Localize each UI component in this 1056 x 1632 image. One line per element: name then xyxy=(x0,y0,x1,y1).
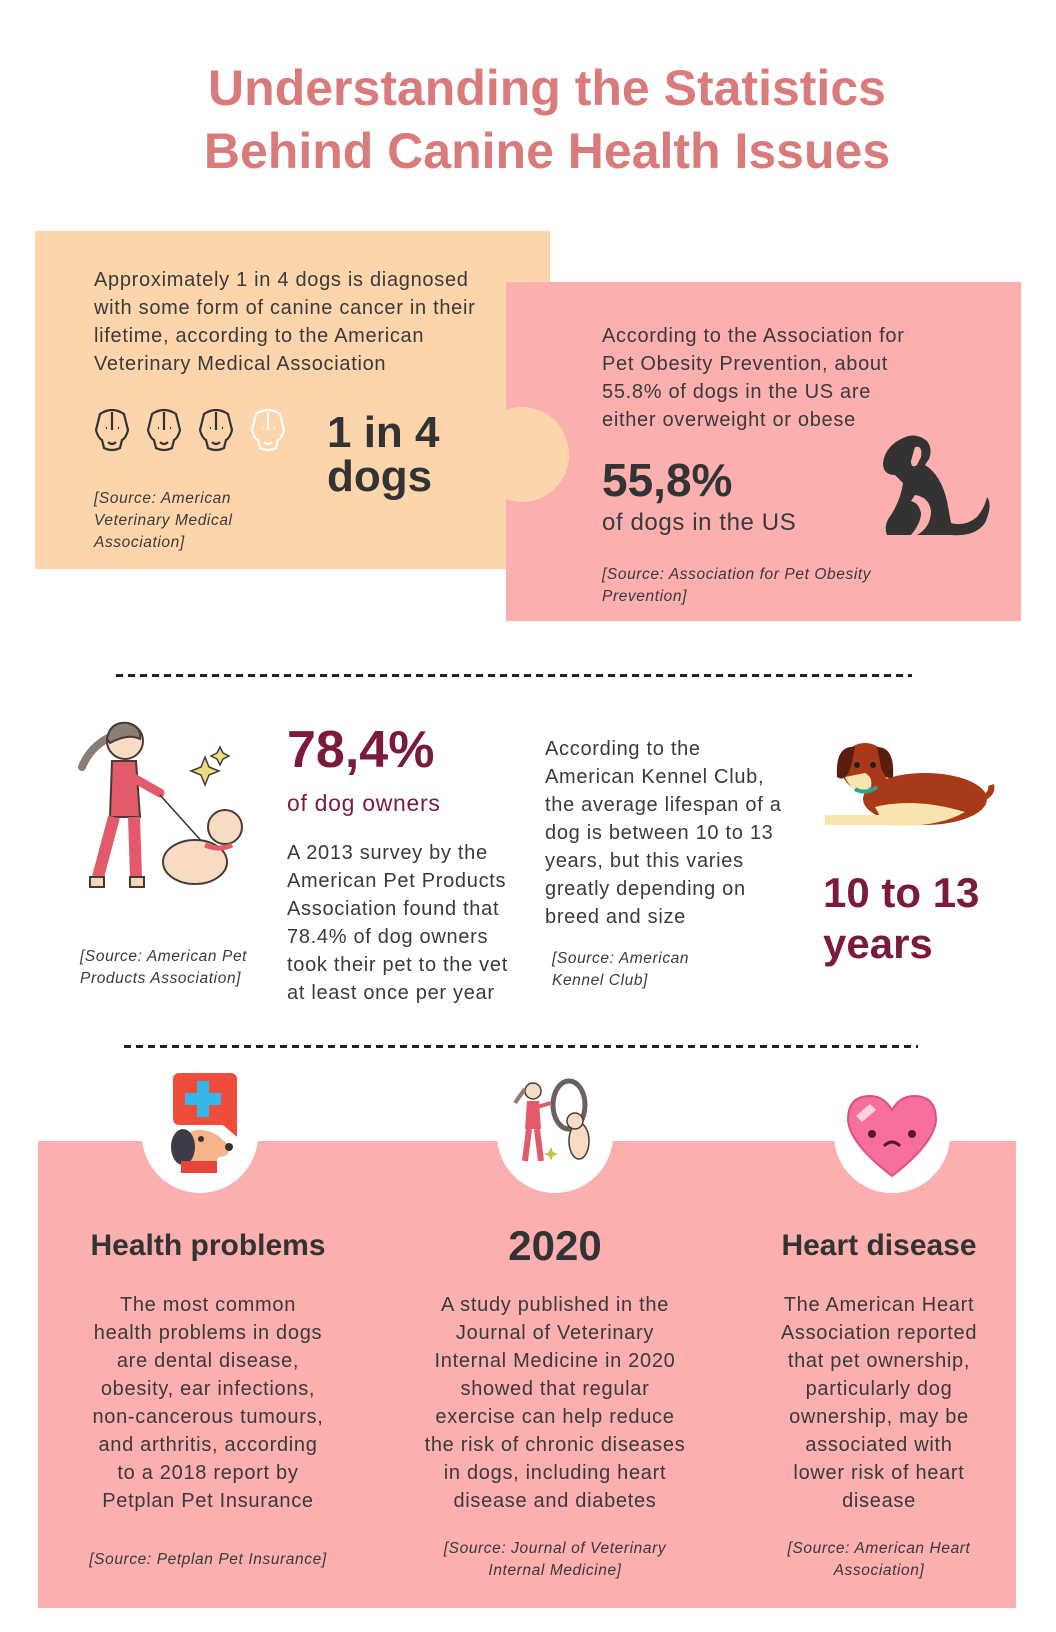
text: health problems: The most common health problems in dogs are dental disease, obesity, ear infections, non-cancerous tumours, and arthritis, according to a 2018 report by Petplan Pet Insurance xyxy=(92,1294,324,1512)
column: heart disease xyxy=(781,1095,977,1579)
text: study: A study published in the Journal of Veterinary Internal Medicine in 2020 showed that regular exercise can help reduce the risk of chronic diseases in dogs, including heart disease and diabetes xyxy=(425,1294,685,1512)
stat: 10 to 13 years: years xyxy=(823,920,933,967)
icon: woman walking dog xyxy=(78,722,243,888)
source: APPA: [Source: American Pet Products Association] xyxy=(80,948,247,987)
title xyxy=(204,60,890,179)
stat: 1 in 4 dogs xyxy=(327,408,440,501)
text: obesity: According to the Association for Pet Obesity Prevention, about 55.8% of dogs in the US are either overweight or obese xyxy=(602,325,905,431)
stat: 78,4%: 78,4% xyxy=(287,721,434,779)
text: cancer: Approximately 1 in 4 dogs is diagnosed with some form of canine cancer in their lifetime, according to the American Veterinary Medical Association xyxy=(94,269,476,375)
bump xyxy=(506,407,569,502)
icon: dog with medical cross xyxy=(171,1073,237,1173)
stat: 10 to 13 years xyxy=(823,869,979,967)
icon: sad heart xyxy=(847,1095,937,1178)
source: JVIM: [Source: Journal of Veterinary Internal Medicine] xyxy=(444,1540,666,1579)
source: APOP: [Source: Association for Pet Obesity Prevention] xyxy=(602,566,871,605)
source: AHA: [Source: American Heart Association] xyxy=(788,1540,970,1579)
panel: obesity xyxy=(506,282,1021,621)
column: 2020 xyxy=(424,1078,685,1579)
source: AKC: [Source: American Kennel Club] xyxy=(552,950,689,989)
stat: 55,8%: 55,8% xyxy=(602,454,732,506)
stat: 10 to 13 years: 10 to 13 xyxy=(823,869,979,916)
icon: dog faces xyxy=(94,408,286,452)
section: lifespan xyxy=(545,738,994,989)
title: Behind Canine Health Issues xyxy=(204,123,890,179)
text: heart: The American Heart Association reported that pet ownership, particularly dog ownership, may be associated with lower risk of heart disease xyxy=(781,1294,977,1512)
source: AVMA: [Source: American Veterinary Medical Association] xyxy=(94,490,233,551)
text: lifespan: According to the American Kennel Club, the average lifespan of a dog is between 10 to 13 years, but this varies greatly depending on breed and size xyxy=(545,738,782,928)
heading: health problems: Health problems xyxy=(90,1229,326,1262)
source: Petplan: [Source: Petplan Pet Insurance] xyxy=(89,1551,327,1568)
text: survey: A 2013 survey by the American Pet Products Association found that 78.4% of dog owners took their pet to the vet at least once per year xyxy=(287,842,508,1004)
panel: bottom cards xyxy=(38,1141,1016,1608)
icon: woman and dog with hoop xyxy=(513,1078,590,1162)
icon: lying dog xyxy=(825,743,994,826)
stat label: of dog owners xyxy=(287,790,441,816)
stat label: of dogs in the US xyxy=(602,509,796,536)
stat: 1 in 4 dogs: dogs xyxy=(327,452,432,501)
column: health problems xyxy=(89,1073,327,1568)
title: Understanding the Statistics xyxy=(208,60,886,116)
heading: heart disease: Heart disease xyxy=(781,1229,977,1262)
section: vet visits xyxy=(78,721,508,1004)
panel: cancer xyxy=(35,231,550,569)
heading: 2020: 2020 xyxy=(508,1222,602,1269)
stat: 1 in 4 dogs: 1 in 4 xyxy=(327,408,440,457)
icon: sitting dog xyxy=(883,436,990,536)
